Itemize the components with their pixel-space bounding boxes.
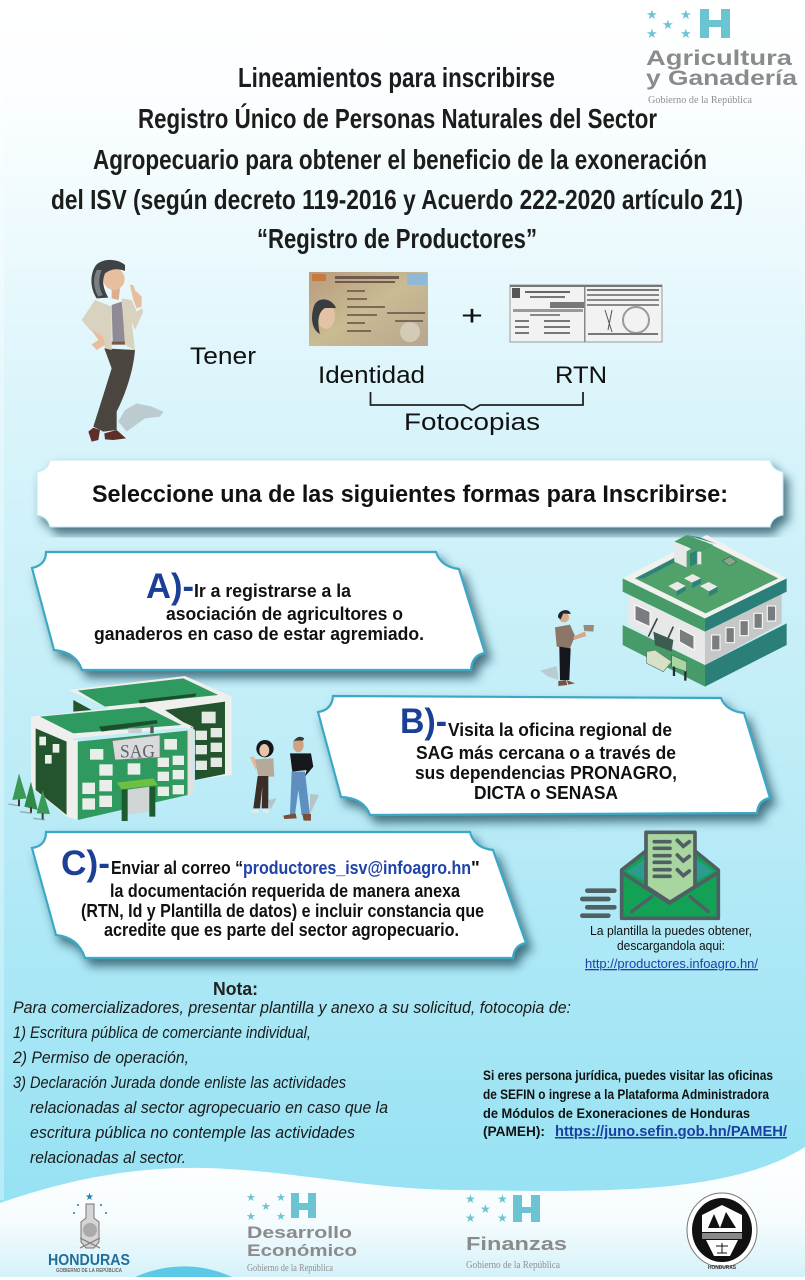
logo: Finanzas: ★ <box>497 1192 508 1206</box>
text: note: 2) Permiso de operación, <box>12 1049 189 1067</box>
panel: option A: Ir a registrarse a la <box>194 580 352 601</box>
logo: Desarrollo Económico: ★ <box>261 1201 271 1213</box>
logo: SAR seal <box>687 1193 757 1271</box>
logo: Agricultura y Ganadería: ★ <box>662 17 674 32</box>
title <box>51 62 743 254</box>
panel: option B: B)- <box>400 702 447 741</box>
panel: option B <box>318 696 770 815</box>
panel: option B: DICTA o SENASA <box>474 782 618 803</box>
logo: Honduras: GOBIERNO DE LA REPÚBLICA <box>56 1267 122 1274</box>
title: Lineamientos para inscribirse <box>238 62 555 93</box>
logo: Honduras: ★ <box>85 1192 94 1203</box>
text: template download: La plantilla la puedes obtener, <box>590 923 752 938</box>
banner: select one form: Seleccione una de las siguientes formas para Inscribirse: <box>92 481 728 508</box>
text: template download <box>585 923 758 971</box>
panel: option B: Visita la oficina regional de <box>448 719 672 740</box>
text: legal entities: de Módulos de Exoneraciones de Honduras <box>483 1106 750 1121</box>
label: Tener: Tener <box>190 343 256 370</box>
title: “Registro de Productores” <box>257 223 537 254</box>
logo: Agricultura y Ganadería: ★ <box>680 7 692 22</box>
title: Registro Único de Personas Naturales del Sector <box>138 103 657 134</box>
panel: option A: A)- <box>146 567 194 606</box>
text: legal entities <box>483 1068 788 1140</box>
logo: Finanzas: ★ <box>497 1211 508 1225</box>
logo: Agricultura y Ganadería: ★ <box>646 7 658 22</box>
panel: option C: acredite que es parte del sector agropecuario. <box>104 919 459 940</box>
text: note: 3) Declaración Jurada donde enliste las actividades <box>13 1074 346 1092</box>
logo: Honduras <box>48 1192 130 1274</box>
logo: Desarrollo Económico <box>246 1192 357 1274</box>
illustration: SAG building: SAG <box>120 741 155 762</box>
logo: Desarrollo Económico: ★ <box>276 1211 286 1223</box>
panel: option A: asociación de agricultores o <box>166 603 403 624</box>
panel: option C: Enviar al correo “ <box>111 857 243 878</box>
banner: select one form <box>37 460 783 527</box>
panel: option A <box>32 552 485 670</box>
text: legal entities: (PAMEH): <box>483 1124 545 1139</box>
logo: Desarrollo Económico: ★ <box>276 1192 286 1204</box>
text: note: Para comercializadores, presentar plantilla y anexo a su solicitud, fotocopia de: <box>13 999 571 1017</box>
logo: Agricultura y Ganadería: Agricultura <box>646 47 792 70</box>
text: legal entities: Si eres persona jurídica, puedes visitar las oficinas <box>483 1068 773 1083</box>
labels and bracket: photocopies: Identidad <box>318 362 425 389</box>
panel: option B: SAG más cercana o a través de <box>416 742 676 763</box>
logo: Desarrollo Económico: Desarrollo <box>247 1223 352 1242</box>
illustration: man with document <box>540 610 594 686</box>
labels and bracket: photocopies <box>318 362 607 436</box>
illustration: SAG building <box>8 676 232 821</box>
logo: Agricultura y Ganadería: ★ <box>646 26 658 41</box>
plus sign: + <box>461 300 483 331</box>
illustration: green office building <box>623 535 787 687</box>
logo: Desarrollo Económico: ★ <box>246 1211 256 1223</box>
text: note: 1) Escritura pública de comerciante individual, <box>13 1024 311 1042</box>
logo: Finanzas: Finanzas <box>466 1234 567 1254</box>
logo: Agricultura y Ganadería: ★ <box>680 26 692 41</box>
logo: Agricultura y Ganadería: y Ganadería <box>646 67 797 90</box>
panel: option C: " <box>471 857 480 878</box>
panel: option C: (RTN, Id y Plantilla de datos) e incluir constancia que <box>81 900 484 921</box>
text: note <box>12 979 571 1167</box>
logo: Agricultura y Ganadería: Gobierno de la República <box>648 94 752 106</box>
logo: Desarrollo Económico: Gobierno de la República <box>247 1263 333 1274</box>
logo: Finanzas: ★ <box>465 1192 476 1206</box>
illustration: woman and man <box>250 737 319 821</box>
labels and bracket: photocopies: Fotocopias <box>404 409 540 436</box>
panel: option C: productores_isv@infoagro.hn <box>243 857 471 878</box>
logo: Agricultura y Ganadería <box>646 7 797 106</box>
labels and bracket: photocopies: RTN <box>555 362 607 389</box>
logo: SAR seal: HONDURAS <box>708 1265 737 1271</box>
identity card photocopy <box>309 272 428 346</box>
text: note: Nota: <box>213 979 258 999</box>
text: legal entities: https://juno.sefin.gob.hn/PAMEH/ <box>555 1123 788 1140</box>
text: note: escritura pública no contemple las actividades <box>30 1124 355 1142</box>
text: template download: http://productores.infoagro.hn/ <box>585 956 758 971</box>
logo: Honduras: HONDURAS <box>48 1252 130 1269</box>
logo: Desarrollo Económico: Económico <box>247 1241 357 1260</box>
logo: Desarrollo Económico: ★ <box>246 1192 256 1204</box>
logo: Finanzas: ★ <box>480 1202 491 1216</box>
logo: Finanzas <box>465 1192 567 1271</box>
text: template download: descargandola aqui: <box>617 938 725 953</box>
text: legal entities: de SEFIN o ingrese a la Plataforma Administradora <box>483 1087 769 1102</box>
panel: option B: sus dependencias PRONAGRO, <box>415 762 677 783</box>
panel: option C: C)- <box>61 844 110 883</box>
icon: envelope with checklist <box>580 832 718 918</box>
panel: option A: ganaderos en caso de estar agremiado. <box>94 623 424 644</box>
panel: option C <box>32 832 526 958</box>
logo: Finanzas: Gobierno de la República <box>466 1260 561 1271</box>
logo: Finanzas: ★ <box>465 1211 476 1225</box>
panel: option C: la documentación requerida de manera anexa <box>110 880 461 901</box>
RTN document photocopy <box>510 285 662 342</box>
text: note: relacionadas al sector. <box>30 1149 186 1167</box>
text: note: relacionadas al sector agropecuario en caso que la <box>30 1099 388 1117</box>
woman illustration <box>82 260 163 442</box>
